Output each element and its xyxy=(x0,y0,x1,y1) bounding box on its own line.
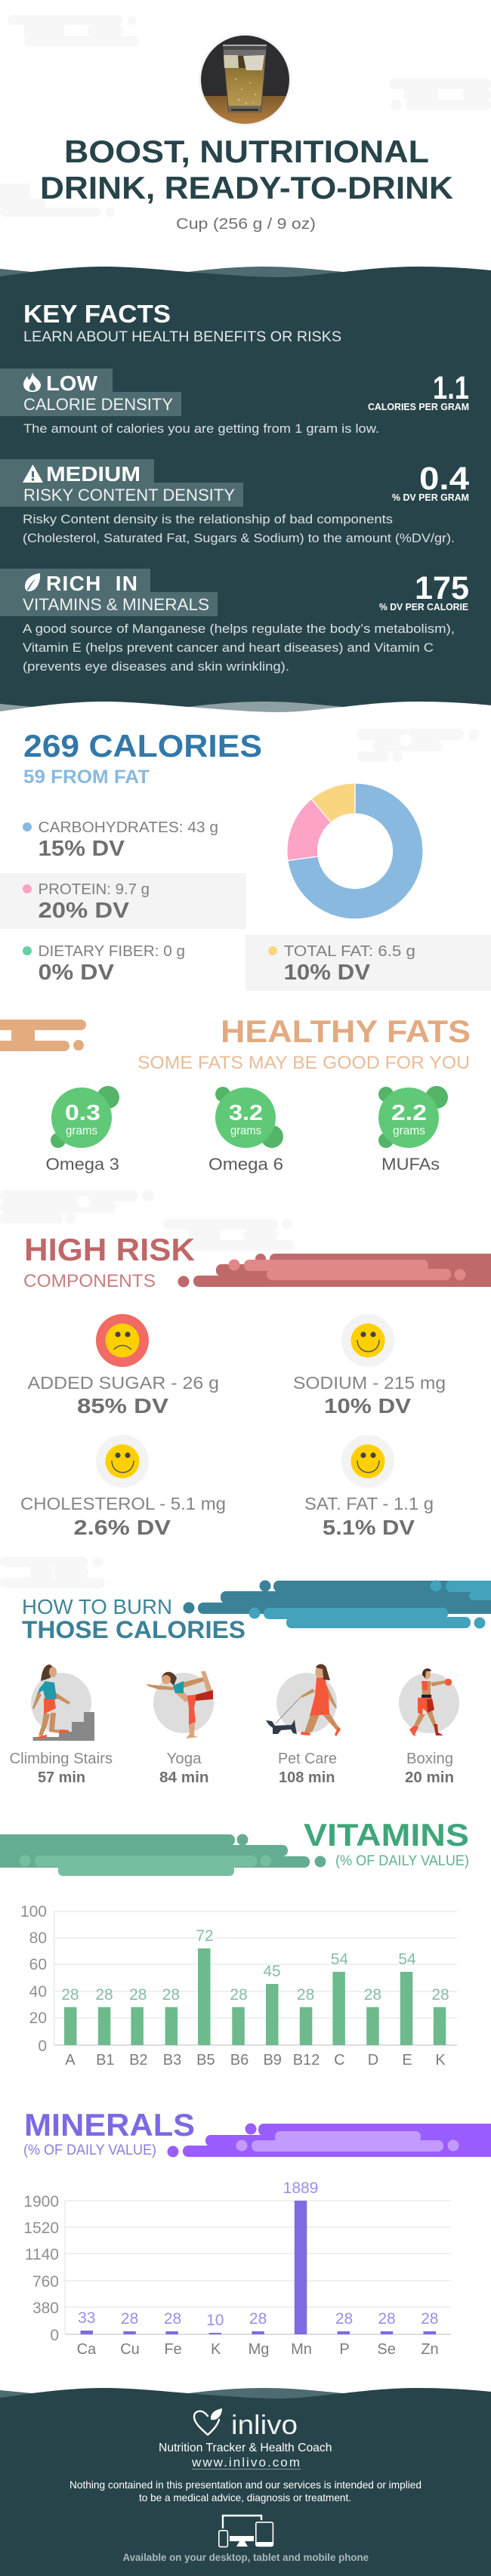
subheading: key facts: LEARN ABOUT HEALTH BENEFITS OR RISKS xyxy=(23,329,341,345)
heading: minerals: MINERALS xyxy=(24,2107,195,2143)
decorative bars: high risk xyxy=(178,1254,491,1287)
serving size: Cup (256 g / 9 oz) xyxy=(176,216,316,233)
fat: omega 6: Omega 6 xyxy=(208,1155,283,1174)
panel: vitamins xyxy=(0,1817,469,2069)
title: DRINK, READY-TO-DRINK xyxy=(40,170,453,205)
bar chart: vitamins: 28 xyxy=(95,1986,113,2004)
bar chart: vitamins: B9 xyxy=(263,2052,282,2069)
item: saturated fat xyxy=(304,1435,434,1539)
disclaimer: to be a medical advice, diagnosis or treatment. xyxy=(139,2491,351,2504)
bar chart: vitamins xyxy=(20,1903,457,2069)
bar chart: minerals: Cu xyxy=(120,2341,140,2358)
item: added sugar xyxy=(27,1314,219,1418)
bar chart: vitamins: 72 xyxy=(196,1927,214,1945)
activity: pet care: 108 min xyxy=(279,1769,335,1786)
fact: calorie density: The amount of calories you are getting from 1 gram is low. xyxy=(23,421,379,436)
item: saturated fat: 5.1% DV xyxy=(323,1516,415,1539)
disclaimer xyxy=(69,2479,422,2504)
legend: total fat xyxy=(268,943,415,985)
subheading: calories from fat: 59 FROM FAT xyxy=(23,767,150,788)
item: sodium xyxy=(293,1314,446,1418)
bar chart: vitamins: B6 xyxy=(230,2052,249,2069)
heading: vitamins: VITAMINS xyxy=(304,1817,469,1853)
bar chart: minerals: 28 xyxy=(335,2310,353,2328)
fact: calorie density: LOW xyxy=(46,372,98,395)
legend: dietary fiber: DIETARY FIBER: 0 g xyxy=(38,943,185,960)
bar chart: minerals: 1900 xyxy=(23,2193,59,2210)
fact: risky content density xyxy=(0,459,469,545)
icon: happy face xyxy=(341,1314,394,1367)
item: added sugar: 85% DV xyxy=(77,1394,168,1418)
activity: boxing: 20 min xyxy=(405,1769,454,1786)
bar chart: vitamins: K xyxy=(435,2052,446,2069)
heading: calories: 269 CALORIES xyxy=(23,728,262,764)
legend: total fat: TOTAL FAT: 6.5 g xyxy=(284,943,415,960)
fact: risky content density: 0.4 xyxy=(419,461,469,497)
bar chart: minerals: 28 xyxy=(121,2310,138,2328)
bar chart: minerals: K xyxy=(211,2341,221,2358)
fat: omega 3: Omega 3 xyxy=(45,1155,119,1174)
bar chart: minerals: 380 xyxy=(32,2300,59,2317)
activity: yoga: 84 min xyxy=(159,1769,208,1786)
legend: dietary fiber xyxy=(23,943,185,985)
fact: rich in vitamins and minerals: RICH IN xyxy=(46,572,137,595)
heading: high risk: HIGH RISK xyxy=(24,1232,195,1267)
bar chart: minerals: 0 xyxy=(50,2327,59,2344)
heading: healthy fats: HEALTHY FATS xyxy=(221,1013,471,1049)
panel: minerals xyxy=(23,2107,491,2358)
bar chart: vitamins: 54 xyxy=(331,1951,348,1968)
bar chart: minerals: Mn xyxy=(291,2341,312,2358)
activity: climbing stairs xyxy=(9,1664,113,1786)
fact: risky content density: MEDIUM xyxy=(46,462,141,486)
legend: protein xyxy=(23,881,150,923)
fat: mufas: MUFAs xyxy=(381,1155,440,1174)
decorative bars: vitamins xyxy=(0,1834,326,1876)
fat: omega 3: 0.3 xyxy=(65,1101,100,1125)
fact: risky content density: (Cholesterol, Saturated Fat, Sugars & Sodium) to the amount (%DV/gr). xyxy=(23,531,455,545)
fact: rich in vitamins and minerals: VITAMINS & MINERALS xyxy=(23,595,209,614)
decorative bars: healthy fats xyxy=(0,1020,86,1051)
bar chart: vitamins: B3 xyxy=(163,2052,181,2069)
icon: boxer xyxy=(409,1668,452,1736)
bar chart: vitamins: 45 xyxy=(263,1963,281,1980)
item: saturated fat: SAT. FAT - 1.1 g xyxy=(304,1494,434,1513)
fat: omega 6: 3.2 xyxy=(229,1101,263,1125)
bar chart: vitamins: 28 xyxy=(230,1986,248,2004)
bar chart: minerals: 28 xyxy=(421,2310,438,2328)
fat: mufas: grams xyxy=(393,1124,425,1137)
decorative bars: burn xyxy=(183,1580,491,1628)
title xyxy=(40,134,453,205)
fat: omega 3: grams xyxy=(66,1124,97,1137)
bar chart: vitamins: D xyxy=(368,2052,378,2069)
icon: woman walking dog xyxy=(266,1664,341,1736)
heading: how to burn: HOW TO BURN xyxy=(22,1595,172,1618)
fat: mufas: 2.2 xyxy=(391,1101,427,1125)
bar chart: vitamins: 100 xyxy=(20,1903,47,1920)
icon: devices xyxy=(219,2516,273,2547)
bar chart: minerals: Ca xyxy=(77,2341,97,2358)
bar chart: minerals: P xyxy=(339,2341,350,2358)
item: cholesterol xyxy=(20,1435,226,1539)
legend: protein: PROTEIN: 9.7 g xyxy=(38,881,150,898)
legend: dietary fiber: 0% DV xyxy=(38,961,115,985)
bar chart: minerals: 28 xyxy=(249,2310,267,2328)
fat: omega 6 xyxy=(208,1087,283,1174)
fact: rich in vitamins and minerals xyxy=(0,569,469,674)
item: cholesterol: 2.6% DV xyxy=(74,1516,171,1539)
bar chart: vitamins: B2 xyxy=(129,2052,148,2069)
item: sodium: 10% DV xyxy=(324,1394,411,1418)
legend: total fat: 10% DV xyxy=(284,961,371,985)
title: BOOST, NUTRITIONAL xyxy=(64,134,429,169)
bar chart: vitamins: A xyxy=(65,2052,76,2069)
legend: carbohydrates: CARBOHYDRATES: 43 g xyxy=(38,819,218,836)
subheading: healthy fats: SOME FATS MAY BE GOOD FOR YOU xyxy=(137,1053,470,1073)
logo: inlivo: inlivo xyxy=(231,2409,298,2440)
subheading: vitamins: (% OF DAILY VALUE) xyxy=(335,1853,469,1869)
bar chart: minerals: 1140 xyxy=(25,2246,59,2263)
legend: carbohydrates: 15% DV xyxy=(38,837,125,861)
bar chart: vitamins: 54 xyxy=(398,1951,416,1968)
bar chart: vitamins: 28 xyxy=(364,1986,381,2004)
activity: boxing xyxy=(399,1668,459,1786)
fact: rich in vitamins and minerals: 175 xyxy=(415,570,469,606)
bar chart: minerals: 33 xyxy=(78,2309,95,2327)
panel: how to burn calories xyxy=(9,1580,491,1786)
subheading: minerals: (% OF DAILY VALUE) xyxy=(23,2143,156,2158)
fact: rich in vitamins and minerals: % DV PER CALORIE xyxy=(379,601,468,612)
activity: climbing stairs: Climbing Stairs xyxy=(9,1751,113,1767)
fact: risky content density: % DV PER GRAM xyxy=(392,492,469,503)
fact: calorie density: 1.1 xyxy=(433,370,469,406)
legend: carbohydrates xyxy=(23,819,218,861)
bar chart: vitamins: B12 xyxy=(293,2052,320,2069)
bar chart: minerals: Mg xyxy=(249,2341,269,2358)
icon: warning xyxy=(23,464,43,483)
fact: calorie density xyxy=(0,369,469,436)
icon: woman in yoga pose xyxy=(146,1671,213,1738)
fact: rich in vitamins and minerals: Vitamin E (helps prevent cancer and heart diseases) and Vitamin C xyxy=(23,640,434,655)
donut chart xyxy=(287,783,423,919)
bar chart: minerals: 10 xyxy=(206,2312,224,2329)
activity: pet care: Pet Care xyxy=(278,1751,337,1767)
activity: climbing stairs: 57 min xyxy=(38,1769,85,1786)
panel: high risk components xyxy=(20,1232,491,1539)
bar chart: vitamins: 80 xyxy=(29,1930,47,1947)
icon: happy face xyxy=(341,1435,394,1488)
legend: protein: 20% DV xyxy=(38,899,130,923)
activity: boxing: Boxing xyxy=(406,1751,453,1767)
icon: happy face xyxy=(96,1435,149,1488)
subheading: components: COMPONENTS xyxy=(23,1271,156,1291)
bar chart: vitamins: 0 xyxy=(38,2038,47,2055)
availability note: Available on your desktop, tablet and mobile phone xyxy=(122,2551,369,2563)
bar chart: minerals: 1520 xyxy=(23,2220,59,2237)
item: added sugar: ADDED SUGAR - 26 g xyxy=(27,1373,219,1393)
bar chart: minerals: 1889 xyxy=(283,2180,318,2197)
decorative bars: minerals xyxy=(168,2124,491,2157)
disclaimer: Nothing contained in this presentation and our services is intended or implied xyxy=(69,2479,422,2491)
bar chart: vitamins: C xyxy=(334,2052,345,2069)
heading: those calories: THOSE CALORIES xyxy=(22,1616,246,1643)
bar chart: minerals: Fe xyxy=(164,2341,182,2358)
bar chart: minerals: 28 xyxy=(164,2310,181,2328)
item: sodium: SODIUM - 215 mg xyxy=(293,1373,446,1393)
bar chart: minerals: 28 xyxy=(378,2310,396,2328)
bar chart: vitamins: 28 xyxy=(297,1986,314,2004)
item: cholesterol: CHOLESTEROL - 5.1 mg xyxy=(20,1494,226,1513)
fat: omega 6: grams xyxy=(230,1124,261,1137)
bar chart: vitamins: E xyxy=(402,2052,412,2069)
tagline: Nutrition Tracker & Health Coach xyxy=(159,2442,332,2454)
bar chart: vitamins: 20 xyxy=(29,2010,47,2027)
bar chart: vitamins: B1 xyxy=(96,2052,115,2069)
fact: risky content density: Risky Content density is the relationship of bad components xyxy=(23,512,393,526)
activity: yoga: Yoga xyxy=(166,1751,202,1767)
icon: flame xyxy=(23,372,41,392)
header xyxy=(40,33,453,233)
icon: woman climbing stairs xyxy=(32,1664,94,1741)
bar chart: vitamins: 28 xyxy=(61,1986,79,2004)
fact: calorie density: CALORIE DENSITY xyxy=(23,395,173,414)
panel: key facts xyxy=(0,267,491,717)
fact: risky content density: RISKY CONTENT DENSITY xyxy=(23,486,235,504)
fat: mufas xyxy=(378,1086,448,1174)
icon: leaf xyxy=(25,573,40,591)
bar chart: minerals: 760 xyxy=(32,2273,59,2291)
fact: rich in vitamins and minerals: A good source of Manganese (helps regulate the body’s metabolism), xyxy=(23,622,455,636)
website link: www.inlivo.com xyxy=(191,2455,300,2470)
icon: sad face xyxy=(96,1314,149,1367)
activity: yoga xyxy=(146,1671,214,1786)
logo: inlivo xyxy=(194,2408,298,2440)
bar chart: vitamins: 40 xyxy=(29,1983,47,2001)
panel: calories xyxy=(0,728,491,991)
bar chart: vitamins: 28 xyxy=(431,1986,449,2004)
bar chart: vitamins: B5 xyxy=(196,2052,215,2069)
panel: healthy fats xyxy=(0,1013,471,1174)
footer xyxy=(0,2388,491,2576)
fat: omega 3 xyxy=(45,1086,119,1174)
heading: key facts: KEY FACTS xyxy=(23,300,171,328)
bar chart: minerals: Se xyxy=(377,2341,396,2358)
activity: pet care xyxy=(266,1664,341,1786)
fact: rich in vitamins and minerals: (prevents eye diseases and skin wrinkling). xyxy=(23,659,289,674)
bar chart: vitamins: 28 xyxy=(162,1986,180,2004)
bar chart: minerals: Zn xyxy=(421,2341,439,2358)
food photo xyxy=(199,33,292,126)
bar chart: vitamins: 28 xyxy=(129,1986,147,2004)
bar chart: vitamins: 60 xyxy=(29,1956,47,1973)
bar chart: minerals xyxy=(23,2180,451,2358)
fact: calorie density: CALORIES PER GRAM xyxy=(368,401,469,412)
